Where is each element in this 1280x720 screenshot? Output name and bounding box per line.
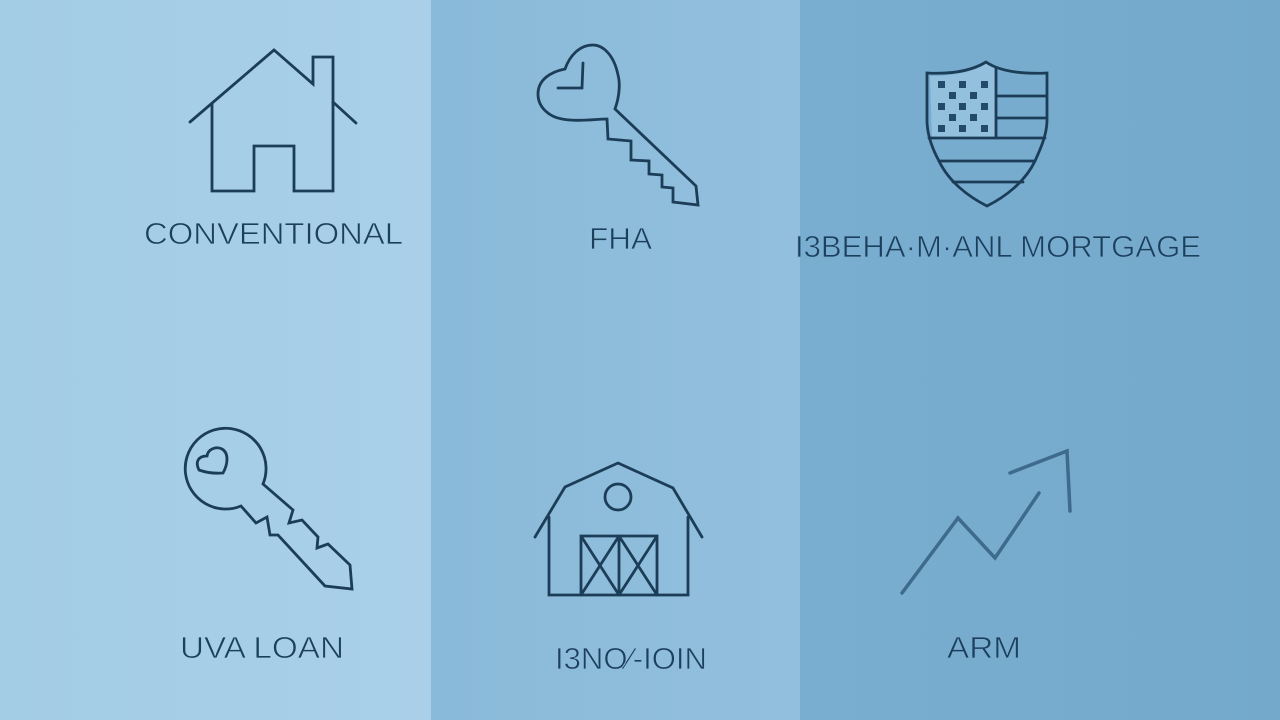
panel: right column	[800, 0, 1280, 720]
shield stars	[938, 81, 988, 132]
shield canton fill	[930, 64, 996, 138]
panel: middle column	[431, 0, 800, 720]
icon: house	[190, 50, 356, 191]
icon: key with heart bow	[538, 45, 698, 205]
shield outline and stripes	[927, 62, 1047, 206]
icon: rising arrow chart	[902, 451, 1070, 593]
icon: key with round bow	[185, 428, 352, 589]
label: conventional: CONVENTIONAL	[144, 216, 403, 251]
label: garbled mortgage heading: I3BEHA·M·ANL MORTGAGE	[795, 229, 1201, 264]
label: ARM: ARM	[947, 630, 1021, 665]
label: VA loan: UVA LOAN	[180, 630, 344, 665]
icon: barn	[535, 463, 702, 595]
label: FHA: FHA	[589, 221, 652, 256]
label: garbled barn caption: I3NO⁄-IOIN	[555, 641, 707, 676]
icon: flag shield	[927, 62, 1047, 206]
panel: left column	[0, 0, 431, 720]
